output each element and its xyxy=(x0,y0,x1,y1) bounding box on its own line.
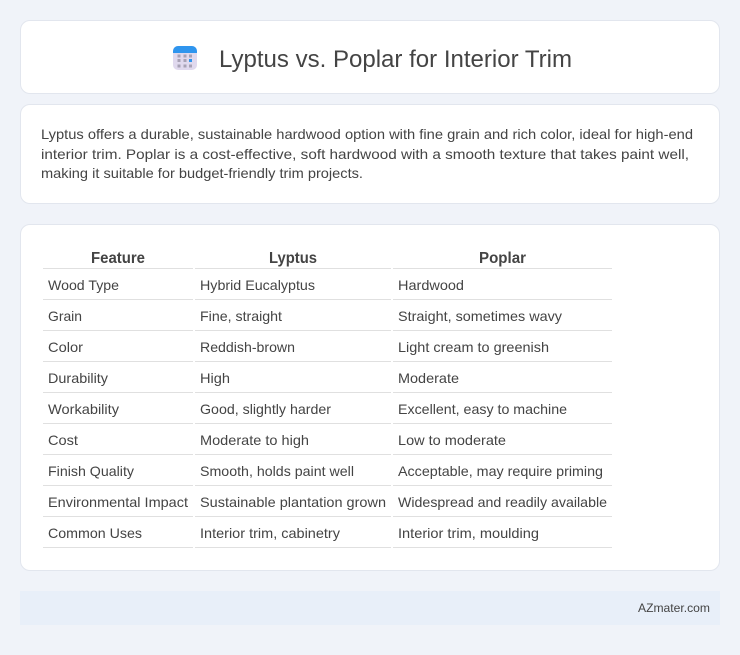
row: cost: Low to moderate xyxy=(398,432,506,448)
panel: title card xyxy=(20,20,720,94)
row: environmental impact xyxy=(48,494,607,510)
panel: comparison table xyxy=(20,224,720,571)
row: common uses: Common Uses xyxy=(48,525,142,541)
table header: Lyptus xyxy=(269,250,317,267)
table header: Feature xyxy=(91,250,145,267)
row: workability: Good, slightly harder xyxy=(200,401,331,417)
row: color: Color xyxy=(48,339,83,355)
row: finish quality xyxy=(48,463,603,479)
row: environmental impact: Environmental Impact xyxy=(48,494,188,510)
table header: Poplar xyxy=(479,250,526,267)
row: finish quality: Finish Quality xyxy=(48,463,134,479)
row: cost: Cost xyxy=(48,432,78,448)
text: description paragraph: interior trim. Poplar is a cost-effective, soft hardwood with a smooth texture that takes paint well, xyxy=(41,146,689,162)
row: workability xyxy=(48,401,567,417)
row: durability: High xyxy=(200,370,230,386)
row: finish quality: Smooth, holds paint well xyxy=(200,463,354,479)
row: durability xyxy=(48,370,459,386)
row: common uses: Interior trim, moulding xyxy=(398,525,539,541)
row: grain: Grain xyxy=(48,308,82,324)
row: wood type: Hardwood xyxy=(398,277,464,293)
row: wood type: Hybrid Eucalyptus xyxy=(200,277,315,293)
panel: description xyxy=(20,104,720,204)
icon: calendar xyxy=(173,46,197,70)
row: common uses xyxy=(48,525,539,541)
text: description paragraph: making it suitable for budget-friendly trim projects. xyxy=(41,165,363,181)
row: workability: Workability xyxy=(48,401,119,417)
footer text: AZmater.com xyxy=(638,601,710,615)
row: grain: Fine, straight xyxy=(200,308,282,324)
row: durability: Moderate xyxy=(398,370,459,386)
text: description paragraph: Lyptus offers a durable, sustainable hardwood option with fine grain and rich color, ideal for high-end xyxy=(41,126,693,142)
row: grain xyxy=(48,308,562,324)
row: grain: Straight, sometimes wavy xyxy=(398,308,562,324)
row: environmental impact: Widespread and readily available xyxy=(398,494,607,510)
row: durability: Durability xyxy=(48,370,108,386)
row: finish quality: Acceptable, may require priming xyxy=(398,463,603,479)
row: color xyxy=(48,339,549,355)
text: description paragraph xyxy=(41,126,693,181)
row: cost: Moderate to high xyxy=(200,432,309,448)
row: wood type xyxy=(48,277,464,293)
row: environmental impact: Sustainable plantation grown xyxy=(200,494,386,510)
row: common uses: Interior trim, cabinetry xyxy=(200,525,340,541)
footer xyxy=(20,591,720,625)
row: workability: Excellent, easy to machine xyxy=(398,401,567,417)
row: wood type: Wood Type xyxy=(48,277,119,293)
row: cost xyxy=(48,432,506,448)
title: Lyptus vs. Poplar for Interior Trim xyxy=(219,46,572,73)
row: color: Reddish-brown xyxy=(200,339,295,355)
row: color: Light cream to greenish xyxy=(398,339,549,355)
table header xyxy=(91,250,526,267)
